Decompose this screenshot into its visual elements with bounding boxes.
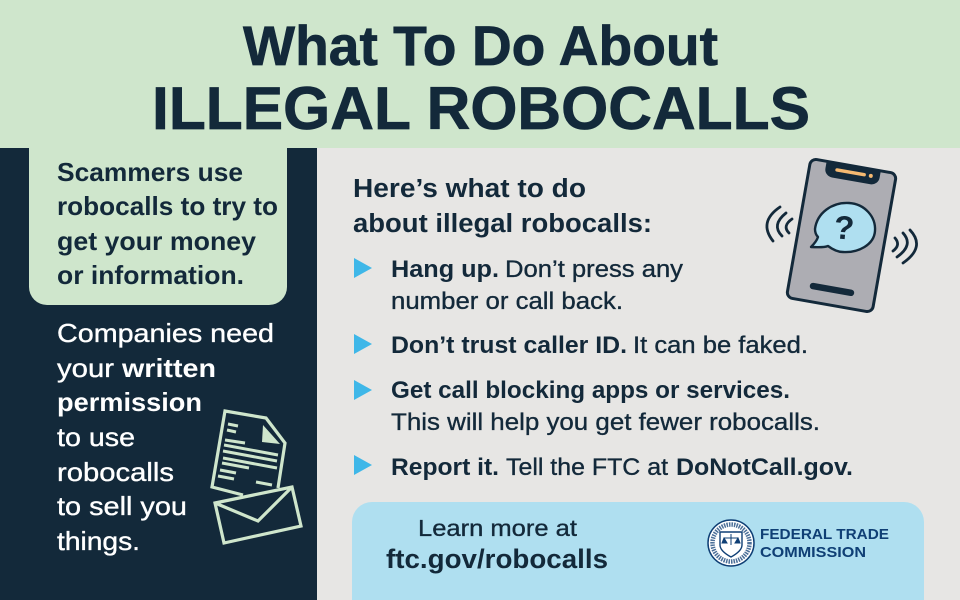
title line 1: What To Do About: [243, 14, 718, 77]
text block: written permission: to use: [57, 422, 135, 452]
phone body: [786, 159, 897, 312]
bullet: caller ID: [354, 332, 808, 359]
heading: what to do: about illegal robocalls:: [353, 210, 652, 238]
bullet: hang up: Don’t press any: [505, 256, 683, 283]
text block: written permission: robocalls: [57, 457, 174, 487]
bullet: call blocking: [354, 377, 820, 436]
bullet: call blocking: This will help you get fewer robocalls.: [391, 409, 820, 436]
bullet: hang up: number or call back.: [391, 288, 623, 315]
bullet: report it: DoNotCall.gov.: [676, 454, 853, 481]
callout text: get your money: [57, 226, 257, 256]
panel: learn more: [352, 502, 924, 600]
callout text: [57, 157, 278, 290]
FTC name: FEDERAL TRADE: [760, 526, 889, 543]
panel: right background: [317, 148, 960, 600]
FTC name: [760, 526, 889, 561]
text block: written permission: Companies need: [57, 318, 274, 348]
callout text: or information.: [57, 260, 244, 290]
FTC name: COMMISSION: [760, 544, 866, 561]
bullet: report it: Report it.: [391, 454, 499, 481]
title line 2: ILLEGAL ROBOCALLS: [152, 75, 810, 142]
bullet: hang up: Hang up.: [391, 256, 499, 283]
bullet: caller ID: Don’t trust caller ID.: [391, 332, 627, 359]
bullet: caller ID: It can be faked.: [633, 332, 808, 359]
icon: document and envelope: [212, 411, 301, 543]
text block: written permission: written: [121, 353, 216, 383]
text block: written permission: permission: [57, 387, 202, 417]
heading: what to do: Here’s what to do: [353, 175, 586, 203]
bullet: hang up: [354, 256, 683, 315]
callout text: robocalls to try to: [57, 191, 278, 221]
text block: written permission: [57, 318, 274, 556]
heading: what to do: [353, 175, 652, 238]
bullet: report it: [354, 454, 853, 481]
question mark: ?: [832, 208, 856, 247]
panel: left dark column: [0, 148, 317, 600]
speech bubble: [811, 203, 875, 252]
callout text: Scammers use: [57, 157, 243, 187]
panel: scammers callout: [29, 148, 287, 305]
url: ftc.gov/robocalls: [386, 544, 608, 574]
text block: written permission: things.: [57, 526, 140, 556]
icon: ringing phone: [767, 159, 917, 312]
bullet: call blocking: Get call blocking apps or services.: [391, 377, 790, 404]
learn more text: Learn more at: [418, 515, 578, 541]
sound waves: [767, 207, 917, 263]
FTC seal: [708, 520, 754, 566]
text block: written permission: your: [57, 353, 114, 383]
bullet: report it: Tell the FTC at: [506, 454, 668, 481]
panel: title banner: [0, 0, 960, 148]
text block: written permission: to sell you: [57, 491, 187, 521]
